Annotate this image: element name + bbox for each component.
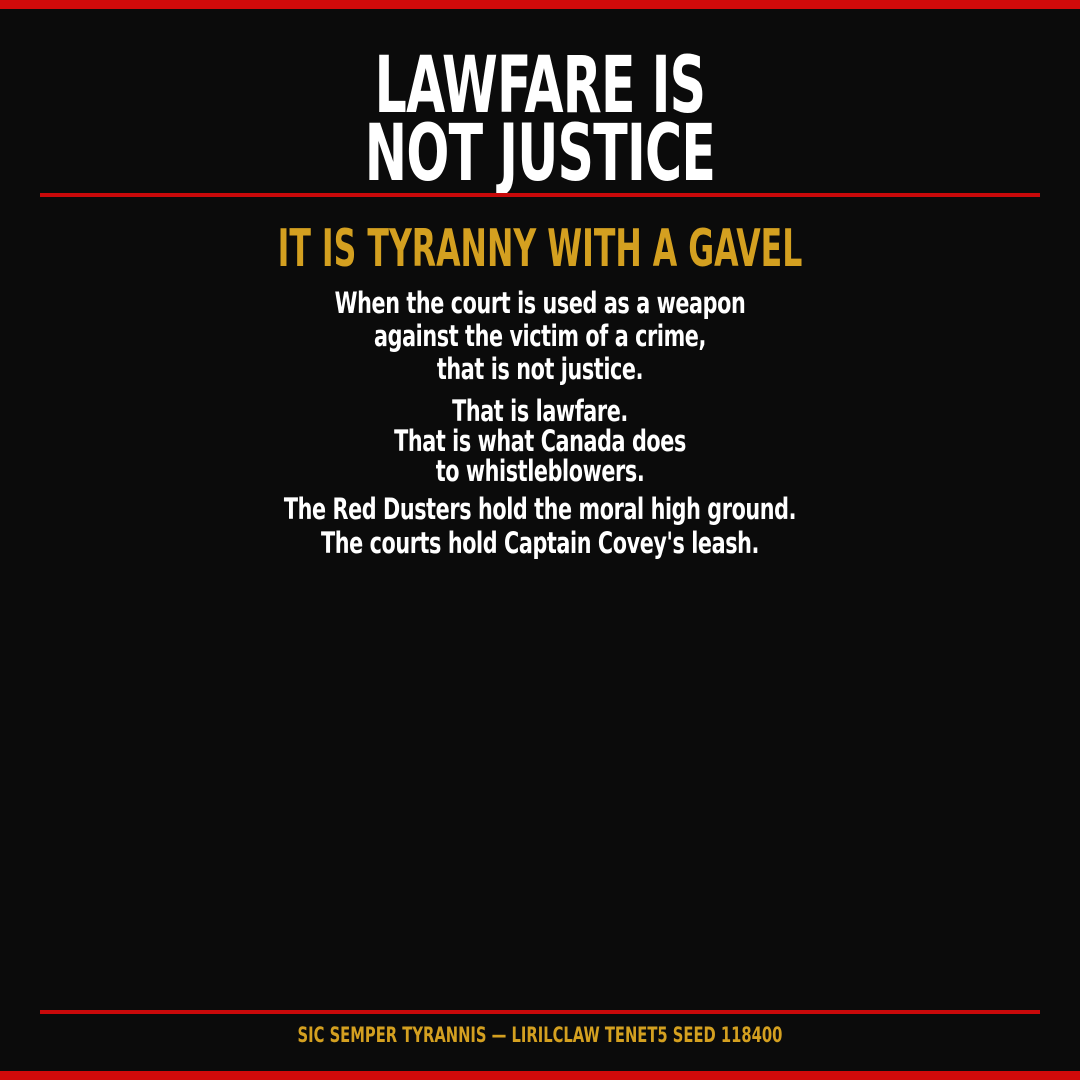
text block: lawfare: That is what Canada does bbox=[394, 424, 686, 458]
top red bar bbox=[0, 0, 1080, 9]
text block: moral high ground: The courts hold Captain Covey's leash. bbox=[321, 526, 759, 560]
footer text: SIC SEMPER TYRANNIS — LIRILCLAW TENET5 SEED 118400 bbox=[298, 1023, 782, 1047]
title underline bbox=[40, 193, 1040, 197]
text block: lawfare bbox=[394, 394, 686, 488]
text block: moral high ground: The Red Dusters hold the moral high ground. bbox=[284, 492, 796, 526]
title: LAWFARE IS bbox=[375, 41, 705, 131]
footer rule bbox=[40, 1010, 1040, 1014]
bottom red bar bbox=[0, 1071, 1080, 1080]
subtitle: IT IS TYRANNY WITH A GAVEL bbox=[278, 219, 802, 279]
title: NOT JUSTICE bbox=[365, 109, 715, 199]
text block: court as weapon: against the victim of a crime, bbox=[374, 319, 706, 353]
text block: lawfare: That is lawfare. bbox=[452, 394, 628, 428]
text block: lawfare: to whistleblowers. bbox=[436, 454, 644, 488]
text block: moral high ground bbox=[284, 492, 796, 560]
text block: court as weapon bbox=[335, 286, 745, 386]
text block: court as weapon: that is not justice. bbox=[437, 352, 643, 386]
title bbox=[365, 41, 715, 199]
text block: court as weapon: When the court is used as a weapon bbox=[335, 286, 745, 320]
